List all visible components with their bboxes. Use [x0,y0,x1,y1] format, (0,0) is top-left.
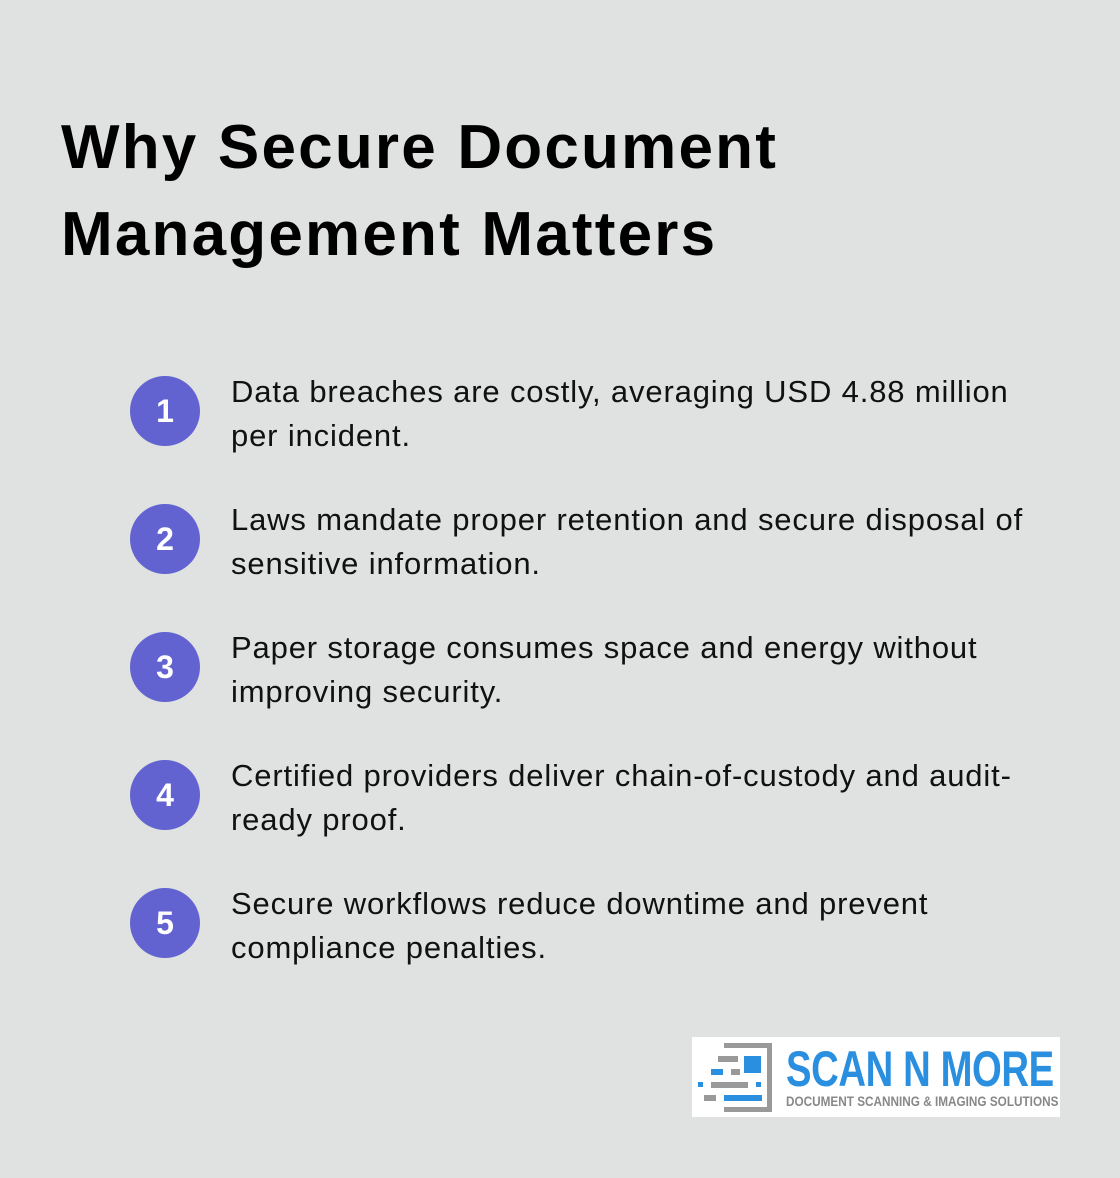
text 3: improving security. [231,674,503,709]
title: Why Secure Document [61,113,778,182]
circle 5: 5 [156,905,174,941]
item 4 [130,758,1012,837]
title: Management Matters [61,200,717,269]
item 3 [130,630,978,709]
text 5 [231,886,928,965]
logo text: SCAN N MORE [786,1041,1054,1097]
circle 2 [130,504,200,574]
circle 1: 1 [156,393,174,429]
text 3 [231,630,978,709]
text 2 [231,502,1023,581]
logo icon [698,1043,772,1112]
circle 5 [130,888,200,958]
text 4 [231,758,1012,837]
text 5: Secure workflows reduce downtime and prevent [231,886,928,921]
circle 1 [130,376,200,446]
text 1 [231,374,1009,453]
text 2: Laws mandate proper retention and secure disposal of [231,502,1023,537]
text 3: Paper storage consumes space and energy without [231,630,978,665]
title [61,113,778,269]
circle 3 [130,632,200,702]
circle 3: 3 [156,649,174,685]
text 5: compliance penalties. [231,930,547,965]
text 1: Data breaches are costly, averaging USD 4.88 million [231,374,1009,409]
text 2: sensitive information. [231,546,541,581]
text 4: ready proof. [231,802,407,837]
item 2 [130,502,1023,581]
logo: DOCUMENT SCANNING & IMAGING SOLUTIONS [786,1093,1058,1109]
text 4: Certified providers deliver chain-of-custody and audit- [231,758,1012,793]
item 1 [130,374,1009,453]
logo [692,1037,1060,1117]
text 1: per incident. [231,418,411,453]
circle 4 [130,760,200,830]
circle 2: 2 [156,521,174,557]
circle 4: 4 [156,777,174,813]
item 5 [130,886,928,965]
